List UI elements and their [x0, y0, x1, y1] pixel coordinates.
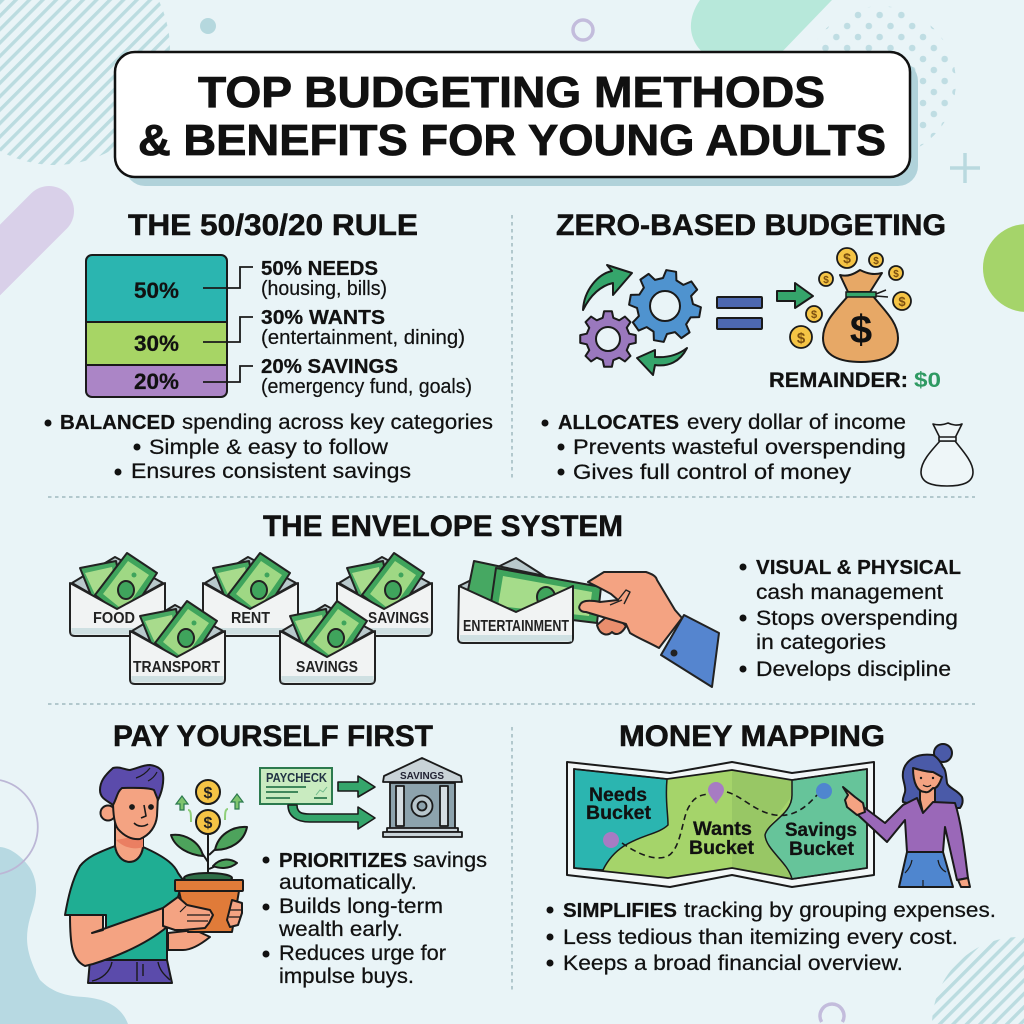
envelope: food: FOOD [93, 610, 135, 627]
icon: coins and growth arrows: $ [204, 785, 213, 802]
benefits list: ALLOCATES [558, 411, 679, 434]
heading: money mapping: MONEY MAPPING [619, 720, 885, 753]
title banner [115, 52, 918, 186]
legend: (housing, bills) [261, 278, 387, 300]
stacked budget bar [86, 255, 253, 397]
icon: paycheck [260, 768, 332, 804]
benefits list: SIMPLIFIES [563, 899, 677, 922]
icon: coins and growth arrows: $ [204, 815, 213, 832]
icon: money bag with coins: $ [898, 294, 906, 309]
stacked budget bar: 20% [134, 369, 179, 394]
illustration: man holding plant [65, 765, 247, 983]
panel: pay yourself first [65, 720, 487, 988]
benefits list: Builds long-term [279, 895, 443, 918]
icon: money bag with coins: $ [843, 250, 851, 266]
title banner: & BENEFITS FOR YOUNG ADULTS [138, 116, 886, 165]
envelope: transport: TRANSPORT [133, 659, 220, 676]
heading: 50/30/20 rule: THE 50/30/20 RULE [128, 209, 418, 242]
icon: paycheck: PAYCHECK [266, 770, 328, 785]
benefits list: Gives full control of money [573, 461, 852, 484]
illustration: folded map: Bucket [586, 803, 652, 824]
icon: money bag with coins: $ [797, 330, 806, 347]
benefits list: Prevents wasteful overspending [573, 436, 906, 459]
envelope: rent: RENT [231, 610, 270, 627]
legend: 50% NEEDS [261, 257, 378, 280]
envelope: savings back: SAVINGS [368, 610, 429, 627]
benefits list [740, 556, 961, 681]
benefits list: Reduces urge for [279, 942, 446, 965]
benefits list: wealth early. [278, 918, 403, 941]
illustration: folded map: Savings [785, 820, 857, 841]
envelope: rent [203, 553, 298, 636]
heading: envelope system: THE ENVELOPE SYSTEM [263, 510, 623, 543]
dividers [48, 215, 975, 990]
benefits list: automatically. [279, 871, 417, 894]
legend [261, 257, 472, 398]
benefits list: every dollar of income [687, 411, 906, 434]
benefits list: Ensures consistent savings [131, 460, 411, 483]
envelope: savings front: SAVINGS [296, 659, 358, 676]
arrows: paycheck to savings [288, 776, 375, 829]
benefits list: PRIORITIZES [279, 849, 407, 872]
remainder label: REMAINDER: [769, 369, 908, 392]
benefits list: Less tedious than itemizing every cost. [563, 926, 958, 949]
illustration: folded map: Needs [589, 785, 647, 806]
envelope: food [70, 553, 165, 636]
icon: money bag with coins: $ [823, 275, 829, 286]
benefits list: Simple & easy to follow [149, 436, 389, 459]
envelope: transport [130, 601, 225, 684]
benefits list [44, 411, 493, 483]
panel: the envelope system [70, 510, 961, 687]
heading: pay yourself first: PAY YOURSELF FIRST [113, 720, 433, 753]
illustration: folded map [567, 762, 874, 887]
benefits list: in categories [756, 631, 886, 654]
illustration: folded map: Bucket [689, 838, 755, 859]
panel: zero-based budgeting [542, 209, 973, 486]
icon: money bag with coins: $ [811, 309, 817, 321]
icon: arrow to money bag [777, 283, 813, 308]
benefits list: Develops discipline [756, 658, 951, 681]
benefits list: Stops overspending [756, 607, 958, 630]
panel: the 50/30/20 rule [44, 209, 493, 483]
icon: money bag with coins: $ [893, 269, 899, 280]
legend: 30% WANTS [261, 306, 385, 329]
benefits list: VISUAL & PHYSICAL [756, 556, 961, 579]
benefits list [546, 899, 996, 975]
remainder label: $0 [914, 369, 941, 392]
icon: money bag with coins: $ [873, 256, 879, 267]
stacked budget bar: 30% [134, 331, 179, 356]
illustration: hand with entertainment envelope [458, 558, 719, 687]
icon: empty bag [921, 423, 973, 486]
benefits list [542, 411, 906, 484]
stacked budget bar: 50% [134, 278, 179, 303]
illustration: woman pointing [843, 744, 970, 887]
benefits list: cash management [756, 581, 943, 604]
legend: (emergency fund, goals) [261, 376, 472, 398]
heading: zero-based budgeting: ZERO-BASED BUDGETING [556, 209, 946, 242]
illustration: folded map: Bucket [789, 839, 855, 860]
title banner: TOP BUDGETING METHODS [198, 68, 825, 117]
icon: money bag with coins: $ [850, 308, 872, 352]
icon: savings bank [383, 758, 462, 837]
icon: coins and growth arrows [176, 780, 243, 834]
benefits list: Keeps a broad financial overview. [563, 952, 903, 975]
icon: gears with cycle arrows [580, 265, 706, 375]
envelope: savings back [337, 553, 432, 636]
illustration: folded map: Wants [693, 819, 752, 840]
envelope: savings front [280, 601, 375, 684]
benefits list: savings [413, 849, 487, 872]
legend: (entertainment, dining) [261, 327, 465, 349]
benefits list [262, 849, 487, 988]
icon: equals sign [717, 297, 762, 329]
benefits list: BALANCED [60, 411, 175, 434]
icon: savings bank: SAVINGS [400, 770, 444, 782]
panel: money mapping [546, 720, 996, 975]
benefits list: spending across key categories [182, 411, 493, 434]
benefits list: impulse buys. [279, 965, 414, 988]
benefits list: tracking by grouping expenses. [684, 899, 996, 922]
legend: 20% SAVINGS [261, 355, 398, 378]
icon: money bag with coins [790, 248, 911, 362]
illustration: hand with entertainment envelope: ENTERTAINMENT [463, 618, 569, 635]
